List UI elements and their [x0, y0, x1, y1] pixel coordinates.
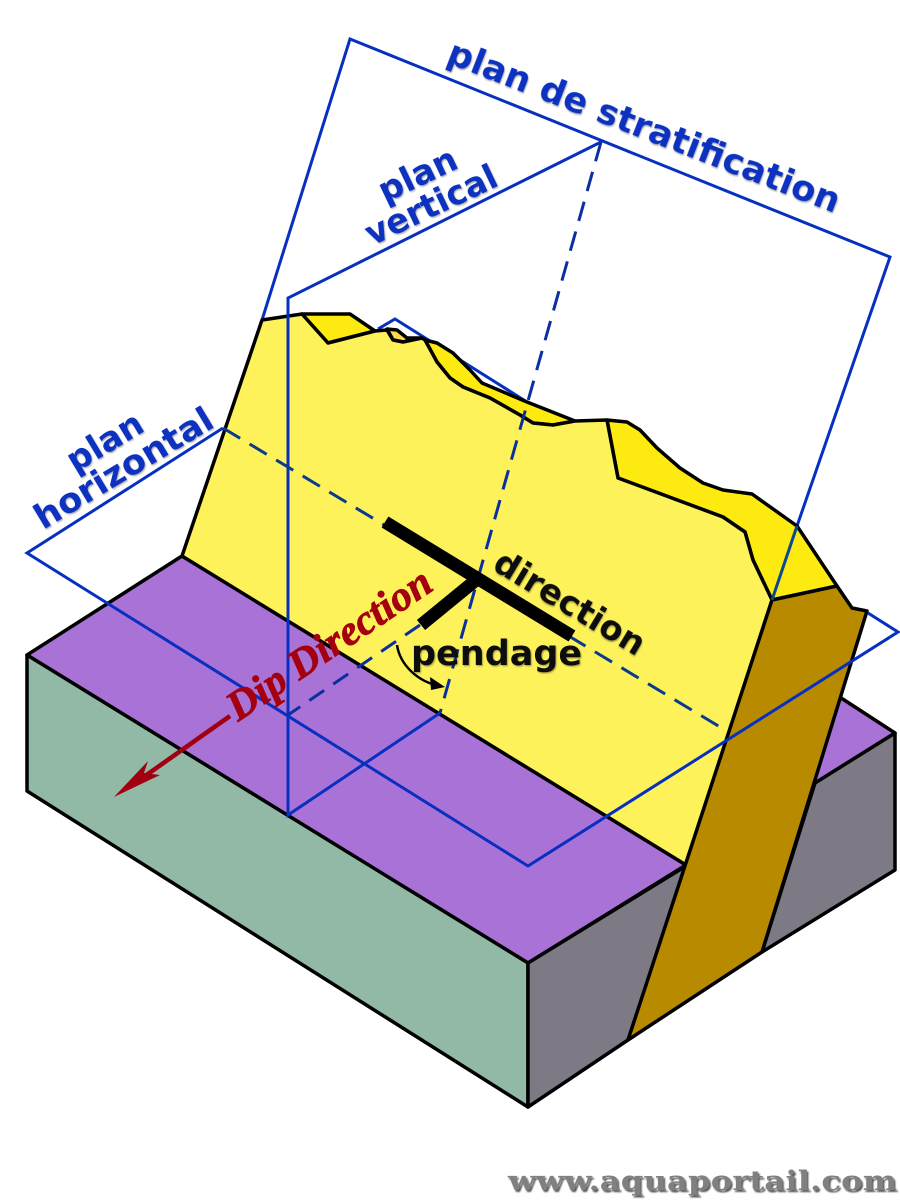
label: direction: direction [486, 542, 653, 664]
layer: yellow bedding back surface middle [425, 340, 575, 425]
block: far right grey face [762, 733, 895, 952]
dip angle arc [397, 645, 445, 690]
plane: horizontal plane rear edge [378, 319, 527, 402]
plane: bedding plane front edges [288, 142, 797, 815]
label: plan vertical: vertical [359, 157, 504, 254]
label: plan horizontal: plan [59, 404, 151, 481]
block: front green face [27, 655, 528, 1107]
layer: yellow bedding back surface right [607, 420, 837, 600]
dip direction arrow [114, 716, 230, 797]
watermark: www.aquaportail.com [507, 1166, 897, 1197]
plane: bedding plane rear outline [262, 39, 890, 526]
layer: ochre section [628, 586, 867, 1040]
label: pendage: pendage [411, 634, 582, 674]
layer: yellow bedding back surface left [302, 314, 375, 343]
block: right purple strip [800, 694, 895, 785]
label: Dip Direction: Dip Direction [217, 559, 441, 731]
layer: yellow bedding back surface small notch [387, 329, 422, 342]
plane: horizontal plane outline [27, 428, 898, 866]
strike and dip symbol [385, 522, 572, 636]
block: right grey face [528, 866, 686, 1107]
block: top purple face [27, 556, 686, 963]
label: plan horizontal: horizontal [27, 399, 221, 538]
layer: yellow bedding face [182, 314, 772, 865]
label: plan de stratification: plan de stratification [442, 33, 846, 222]
label: plan vertical: plan [372, 139, 464, 211]
